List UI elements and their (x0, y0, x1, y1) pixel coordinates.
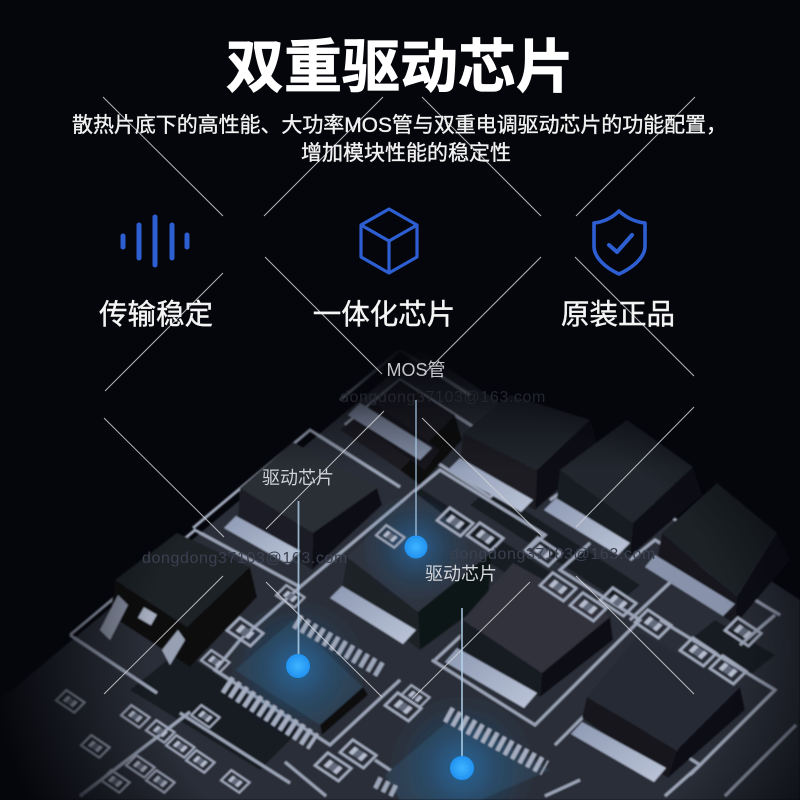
chip: driver left upper (224, 442, 382, 570)
watermark text: dongdong37103@163.com (142, 550, 348, 567)
label: 传输稳定: 传输稳定 (99, 299, 213, 331)
IC: left with pins (226, 598, 382, 742)
IC: bottom with pins (376, 693, 550, 800)
dark channels between chip frames (130, 488, 775, 770)
callout: 驱动芯片 right: 驱动芯片 (425, 564, 497, 584)
icon: cube (361, 209, 417, 273)
watermark text: dongdong37103@163.com (340, 389, 546, 406)
subtitle text: 增加模块性能的稳定性 (301, 142, 511, 165)
icon: shield with check (594, 211, 645, 274)
circuit traces (70, 350, 796, 796)
chip: upper row A (448, 395, 600, 512)
callout: 驱动芯片 left (262, 468, 334, 678)
subtitle text (72, 114, 727, 165)
icon: sound wave (123, 217, 187, 265)
callout: MOS管: MOS管 (386, 360, 446, 380)
board base (0, 350, 800, 800)
watermark text (142, 389, 656, 567)
glow: centre chip (368, 500, 464, 594)
chip: MOS top (340, 380, 462, 485)
chip: left large (100, 533, 257, 667)
chip: upper row C (645, 483, 790, 625)
callout: 驱动芯片 left: 驱动芯片 (262, 468, 334, 488)
title: 双重驱动芯片 (226, 35, 574, 100)
label: 原装正品: 原装正品 (561, 299, 675, 331)
watermark text: dongdong37103@163.com (450, 546, 656, 563)
callout: MOS管 (386, 360, 446, 558)
chip: upper row B (544, 420, 702, 556)
label: 一体化芯片: 一体化芯片 (313, 299, 455, 331)
decorative diagonal lines (103, 97, 695, 699)
chip: large centre right (445, 563, 613, 708)
callout: 驱动芯片 right (425, 564, 497, 780)
subtitle text: 散热片底下的高性能、大功率MOS管与双重电调驱动芯片的功能配置， (72, 114, 727, 137)
chip: centre with blue top (MOS dot) (330, 492, 492, 650)
small capacitors (56, 508, 761, 793)
chip: large lower right (570, 687, 745, 783)
photo: circuit board (0, 350, 800, 800)
